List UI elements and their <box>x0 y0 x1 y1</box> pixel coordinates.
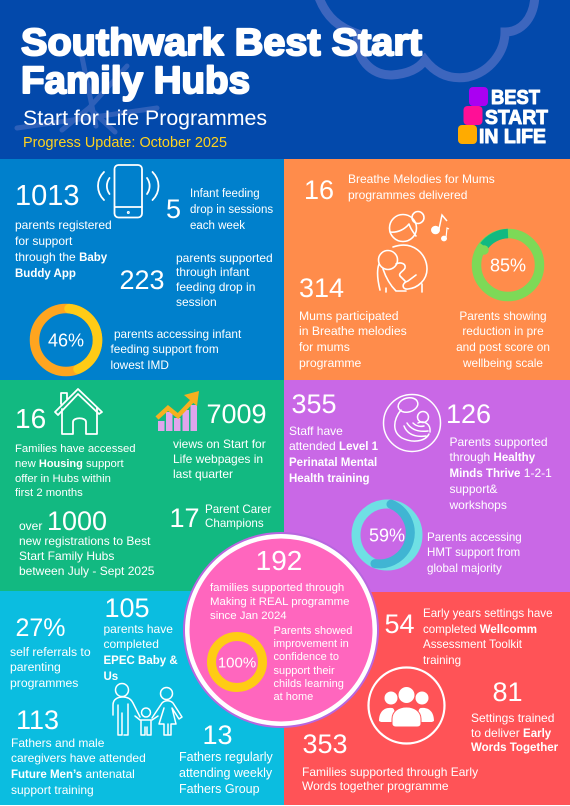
text: EPEC Baby and Us: EPEC Baby & <box>104 655 178 667</box>
stat: 223: 223 <box>120 265 165 295</box>
donut chart: 59%: 59% <box>369 526 405 546</box>
text: families supported: Words together programme <box>302 779 449 793</box>
text: Level 1 training: Staff have <box>289 424 343 438</box>
icon: parent and baby in circle <box>384 394 440 452</box>
text: champions: Parent Carer <box>205 503 272 516</box>
text: Fathers Group: Fathers Group <box>179 782 260 796</box>
text: families supported: Families supported through Early <box>302 765 478 779</box>
stat: 17: 17 <box>170 503 200 533</box>
stat: 192: 192 <box>256 545 302 576</box>
text: Mums participated: in Breathe melodies <box>299 324 407 338</box>
text: registrations: Start Family Hubs <box>19 549 114 563</box>
text: Wellcomm: completed Wellcomm <box>423 623 537 636</box>
text: Future Men's training: caregivers have attended <box>11 751 146 765</box>
donut chart: 100%: 100% <box>218 654 256 672</box>
text: Early Words Together: Settings trained <box>471 711 554 725</box>
text: Healthy Minds Thrive: Parents supported <box>450 435 548 449</box>
text: self referrals: self referrals to <box>10 645 91 659</box>
text: parents supported: through infant <box>176 265 250 279</box>
text: Future Men's training: Future Men’s antenatal <box>11 767 135 781</box>
text: Mums participated: Mums participated <box>299 309 399 323</box>
icon: family holding hands <box>113 684 182 735</box>
stat: 81: 81 <box>492 677 523 707</box>
text: Making it REAL: Making it REAL programme <box>210 596 349 608</box>
donut chart: 59% <box>356 504 418 566</box>
text: Wellcomm: Assessment Toolkit <box>423 638 523 651</box>
decorative cloud outline <box>318 0 535 78</box>
stat: 355: 355 <box>292 389 337 419</box>
panel: fathers and parenting <box>0 591 285 805</box>
text: housing support: first 2 months <box>15 487 83 499</box>
text: self referrals: parenting <box>10 660 61 674</box>
text: Early Words Together: Words Together <box>471 742 559 754</box>
panel: perinatal mental health <box>285 380 570 592</box>
stat: 27%: 27% <box>16 614 66 642</box>
text: Baby Buddy registrations: Buddy App <box>15 268 76 280</box>
donut chart: 46%: 46% <box>48 330 84 350</box>
text: EPEC Baby and Us: parents have <box>104 622 173 636</box>
text: webpage views: Life webpages in <box>173 452 263 466</box>
icon: music notes <box>432 215 449 241</box>
text: Wellcomm: Early years settings have <box>423 607 553 620</box>
text: housing support: Families have accessed <box>15 443 136 455</box>
text: Mums participated: for mums <box>299 340 350 354</box>
icon: group of people in circle <box>368 668 444 744</box>
stat: 353: 353 <box>302 729 348 759</box>
stat: 314: 314 <box>299 273 344 303</box>
stat: 113: 113 <box>16 705 59 735</box>
text: Making it REAL: families supported through <box>210 582 344 594</box>
panel: early words <box>285 592 570 805</box>
stat: over 1000 <box>19 506 107 536</box>
text: wellbeing scale: reduction in pre <box>462 324 544 338</box>
stat: 16 programmes: 16 <box>304 175 334 205</box>
text: confidence: at home <box>274 691 313 703</box>
text: Baby Buddy registrations: through the Baby <box>15 250 107 264</box>
text: housing support: offer in Hubs within <box>15 473 111 485</box>
text: registrations: between July - Sept 2025 <box>19 564 155 578</box>
subtitle: Start for Life Programmes <box>23 107 267 130</box>
text: wellbeing scale: Parents showing <box>459 309 547 323</box>
text: housing support: new Housing support <box>15 458 124 470</box>
text: confidence: childs learning <box>274 678 344 690</box>
stat: 7009: 7009 <box>206 399 267 429</box>
stat: 105: 105 <box>104 593 150 623</box>
panel: infant feeding and Baby Buddy <box>0 159 285 380</box>
text: EPEC Baby and Us: completed <box>104 637 159 651</box>
text: parents supported: parents supported <box>176 251 273 265</box>
logo: Best Start in Life <box>458 87 548 148</box>
donut chart: 46% <box>34 308 98 372</box>
text: Early Words Together: to deliver Early <box>471 726 551 740</box>
text: programmes delivered: Breathe Melodies for Mums <box>348 172 495 186</box>
header panel <box>0 0 570 159</box>
text: Level 1 training: Health training <box>289 473 370 485</box>
text: Level 1 training: Perinatal Mental <box>289 457 377 469</box>
icon: phone with signal waves <box>98 165 158 218</box>
donut chart: 85% <box>476 229 540 296</box>
text: webpage views: last quarter <box>173 467 233 481</box>
text: confidence: improvement in <box>274 638 349 650</box>
text: confidence: Parents showed <box>274 625 352 637</box>
text: Baby Buddy registrations: for support <box>15 234 73 248</box>
text: Level 1 training: attended Level 1 <box>289 439 378 453</box>
icon: house <box>55 389 102 434</box>
text: global majority: global majority <box>427 562 502 575</box>
text: lowest IMD: parents accessing infant <box>114 327 242 341</box>
stat: over 1000: over <box>19 519 42 533</box>
text: Future Men's training: Fathers and male <box>11 736 105 750</box>
stat: 1013: 1013 <box>15 180 80 212</box>
donut chart: 85%: 85% <box>490 256 526 276</box>
text: Mums participated: programme <box>299 356 362 370</box>
text: lowest IMD: lowest IMD <box>110 358 169 372</box>
text: Fathers Group: Fathers regularly <box>179 750 274 764</box>
text: Healthy Minds Thrive: through Healthy <box>450 450 535 464</box>
progress update date: Progress Update: October 2025 <box>23 135 227 151</box>
icon: mother holding baby <box>377 212 427 292</box>
text: drop in sessions: Infant feeding <box>190 188 260 200</box>
text: lowest IMD: feeding support from <box>110 342 219 356</box>
text: Future Men's training: support training <box>11 783 94 797</box>
text: Baby Buddy registrations: parents registered <box>15 218 112 232</box>
logo: Best Start in Life: IN LIFE <box>479 126 546 148</box>
stat: over 1000: 1000 <box>47 506 107 536</box>
text: confidence: support their <box>274 665 335 677</box>
logo: Best Start in Life: START <box>485 107 548 129</box>
title: Family Hubs <box>21 60 250 102</box>
stat: 13: 13 <box>202 720 233 750</box>
text: confidence: confidence to <box>274 651 339 663</box>
panel: Making it REAL centre circle <box>183 532 379 728</box>
text: self referrals: programmes <box>10 676 78 690</box>
stat: 54: 54 <box>384 609 415 639</box>
text: parents supported: session <box>176 295 217 309</box>
text: wellbeing scale: wellbeing scale <box>462 356 543 370</box>
text: Wellcomm: training <box>423 654 461 667</box>
text: Making it REAL: since Jan 2024 <box>210 610 287 622</box>
text: global majority: HMT support from <box>427 546 520 559</box>
decorative star outline <box>17 57 157 132</box>
stat: 5: 5 <box>166 194 181 224</box>
title: Southwark Best Start <box>21 22 422 64</box>
stat: 16 families: 16 <box>15 403 46 434</box>
text: Fathers Group: attending weekly <box>179 766 273 780</box>
text: drop in sessions: drop in sessions <box>190 204 273 216</box>
text: champions: Champions <box>205 517 264 530</box>
text: drop in sessions: each week <box>190 220 245 232</box>
logo: Best Start in Life: BEST <box>491 87 540 109</box>
text: registrations: new registrations to Best <box>19 534 151 548</box>
text: global majority: Parents accessing <box>427 531 522 544</box>
panel: housing and registrations <box>0 380 285 591</box>
text: programmes delivered: programmes delivered <box>348 188 467 202</box>
text: wellbeing scale: and post score on <box>456 340 550 354</box>
panel: Breathe Melodies <box>285 159 570 380</box>
text: EPEC Baby and Us: Us <box>104 671 118 683</box>
text: webpage views: views on Start for <box>173 437 266 451</box>
icon: rising chart <box>157 391 199 431</box>
text: Healthy Minds Thrive: Minds Thrive 1-2-1 <box>450 466 552 480</box>
text: parents supported: feeding drop in <box>176 280 255 294</box>
donut chart: 100% <box>212 636 262 688</box>
text: Healthy Minds Thrive: support& <box>450 482 498 496</box>
title <box>21 22 422 102</box>
stat: 126: 126 <box>446 399 491 429</box>
text: Healthy Minds Thrive: workshops <box>448 498 507 512</box>
